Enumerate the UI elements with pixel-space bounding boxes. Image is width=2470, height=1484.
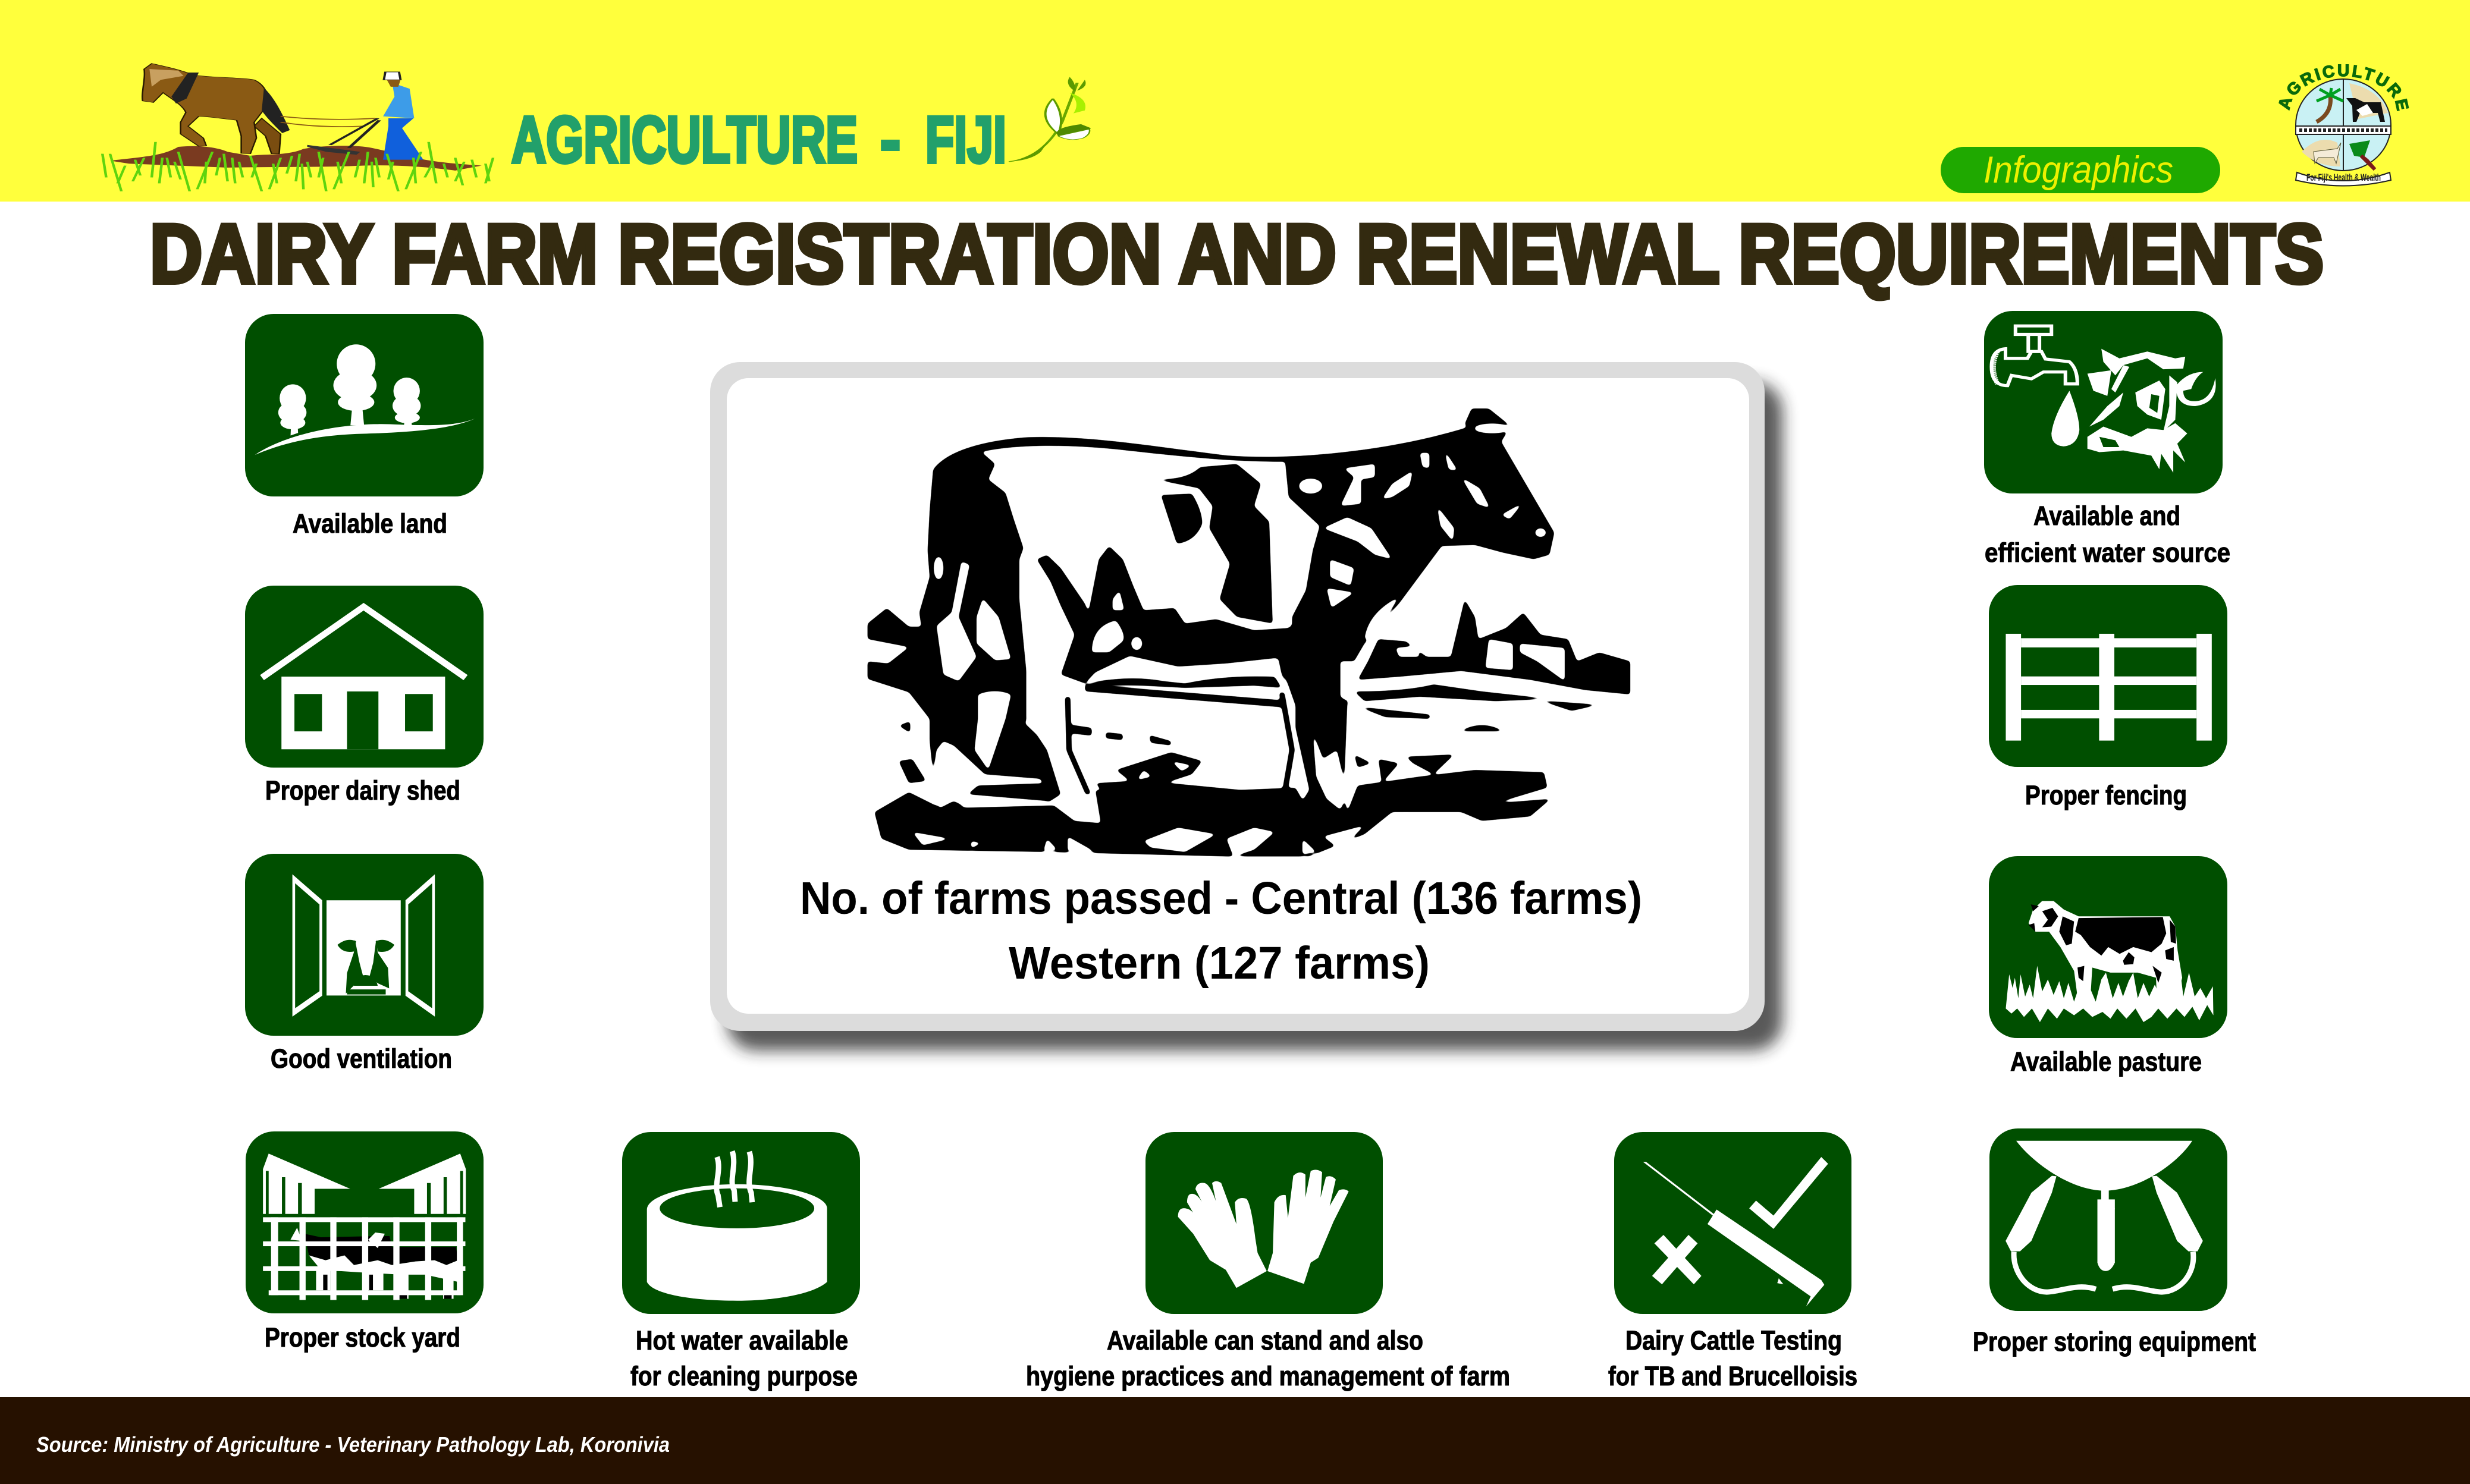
icon: tap and cow head [1991,326,2216,473]
label: efficient water source [1985,537,2230,568]
icon: milking claw [2005,1141,2203,1292]
header wordmark: - [880,103,900,177]
label [1608,1325,1857,1391]
stat text: farms passed: No. of farms passed - Central (136 farms) [800,873,1642,924]
requirement: proper storing equipment [1973,1128,2256,1357]
icon: fence [2005,634,2212,741]
requirement: hot water [622,1132,860,1391]
requirement: proper stock yard [246,1131,484,1353]
requirement: proper dairy shed [245,586,484,806]
infographics badge [1941,147,2220,193]
logo: agriculture emblem: For Fiji's Health & Wealth [2306,172,2381,183]
stat text: farms passed [800,873,1642,989]
icon: horse and ploughman [102,64,493,191]
requirement: proper fencing [1989,585,2227,810]
requirement: water source [1984,311,2230,568]
label: for cleaning purpose [630,1361,858,1391]
label: Available land [293,508,447,539]
stat text: farms passed: Western (127 farms) [1009,938,1430,989]
label: hygiene practices and management of farm [1026,1361,1510,1391]
icon: leaf sprig [1009,77,1091,162]
label [1026,1325,1510,1391]
label: Proper storing equipment [1973,1326,2256,1357]
icon: cow on pasture [2005,901,2213,1022]
header wordmark: AGRICULTURE [511,103,858,177]
label: for TB and Brucelloisis [1608,1361,1857,1391]
illustration: holstein cow [850,397,1651,867]
label [1985,501,2230,568]
icon: gloves [1178,1169,1349,1288]
requirement: available land [245,314,484,539]
panel: central cow card [710,362,1782,1051]
label: Proper dairy shed [265,775,460,806]
requirement: can stand and hygiene [1026,1132,1510,1391]
label: Available can stand and also [1107,1325,1423,1356]
icon: trees on land [255,344,475,455]
requirement: available pasture [1989,856,2227,1077]
icon: syringe, tick and cross [1643,1157,1828,1306]
label: Dairy Cattle Testing [1625,1325,1842,1356]
label: Available and [2033,501,2180,531]
label: Available pasture [2010,1046,2202,1077]
logo: agriculture emblem [2278,64,2409,187]
icon: open window with cow [294,879,434,1013]
logo: agriculture emblem: AGRICULTURE [2278,64,2409,111]
requirement: good ventilation [245,854,484,1074]
icon: shed [260,603,467,749]
source note: Source: Ministry of Agriculture - Veterinary Pathology Lab, Koronivia [36,1432,670,1457]
footer band [0,1397,2470,1484]
header band [0,0,2470,202]
header wordmark: FIJI [925,103,1006,177]
requirement: dairy cattle testing [1608,1132,1857,1391]
infographics badge: Infographics [1983,149,2173,191]
label [630,1325,858,1391]
label: Proper stock yard [265,1322,460,1353]
label: Proper fencing [2025,780,2187,810]
icon: hot water tub [647,1151,827,1301]
icon: stock yard with cows [263,1153,466,1300]
label: Good ventilation [271,1043,452,1074]
label: Hot water available [636,1325,848,1356]
